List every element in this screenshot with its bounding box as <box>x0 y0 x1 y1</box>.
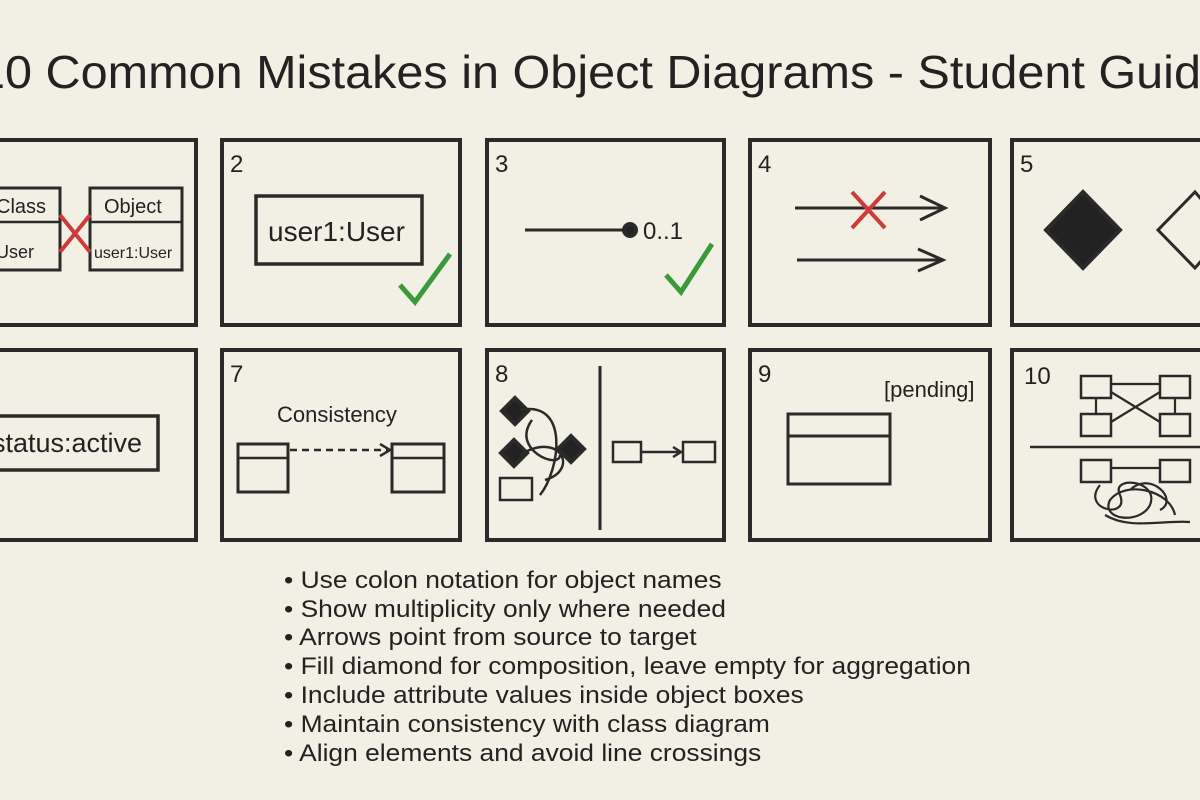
title: 10 Common Mistakes in Object Diagrams - Student Guide <box>0 46 1200 98</box>
panel 4: 4 <box>758 151 771 178</box>
panel 9: 9 <box>758 361 771 388</box>
bullet list <box>284 567 971 767</box>
panel 7: Consistency <box>277 402 397 427</box>
bullet list: • Include attribute values inside object boxes <box>284 682 804 709</box>
bullet list: • Use colon notation for object names <box>284 567 722 594</box>
panel 8 <box>487 350 724 540</box>
panel 1: Object <box>104 196 162 218</box>
panel 2: 2 <box>230 151 243 178</box>
bullet list: • Fill diamond for composition, leave empty for aggregation <box>284 653 971 680</box>
panel 10 <box>1012 350 1200 540</box>
panel 3: 3 <box>495 151 508 178</box>
bullet list: • Arrows point from source to target <box>284 624 697 651</box>
panel 8: 8 <box>495 361 508 388</box>
panel 6 <box>0 350 196 540</box>
panel 3: 0..1 <box>643 218 683 245</box>
panel 3 <box>487 140 724 325</box>
panel 2: user1:User <box>268 216 405 247</box>
panel 5: 5 <box>1020 151 1033 178</box>
panel 7 <box>222 350 460 540</box>
panel 2 <box>222 140 460 325</box>
panel 7: 7 <box>230 361 243 388</box>
panel 1: user1:User <box>94 245 173 262</box>
panel 1 <box>0 140 196 325</box>
panel 5 <box>1012 140 1200 325</box>
panel 10: 10 <box>1024 363 1051 390</box>
panel 9: [pending] <box>884 377 975 402</box>
bullet list: • Maintain consistency with class diagram <box>284 711 770 738</box>
panel 9 <box>750 350 990 540</box>
bullet list: • Show multiplicity only where needed <box>284 596 726 623</box>
bullet list: • Align elements and avoid line crossings <box>284 740 761 767</box>
panel 4 <box>750 140 990 325</box>
